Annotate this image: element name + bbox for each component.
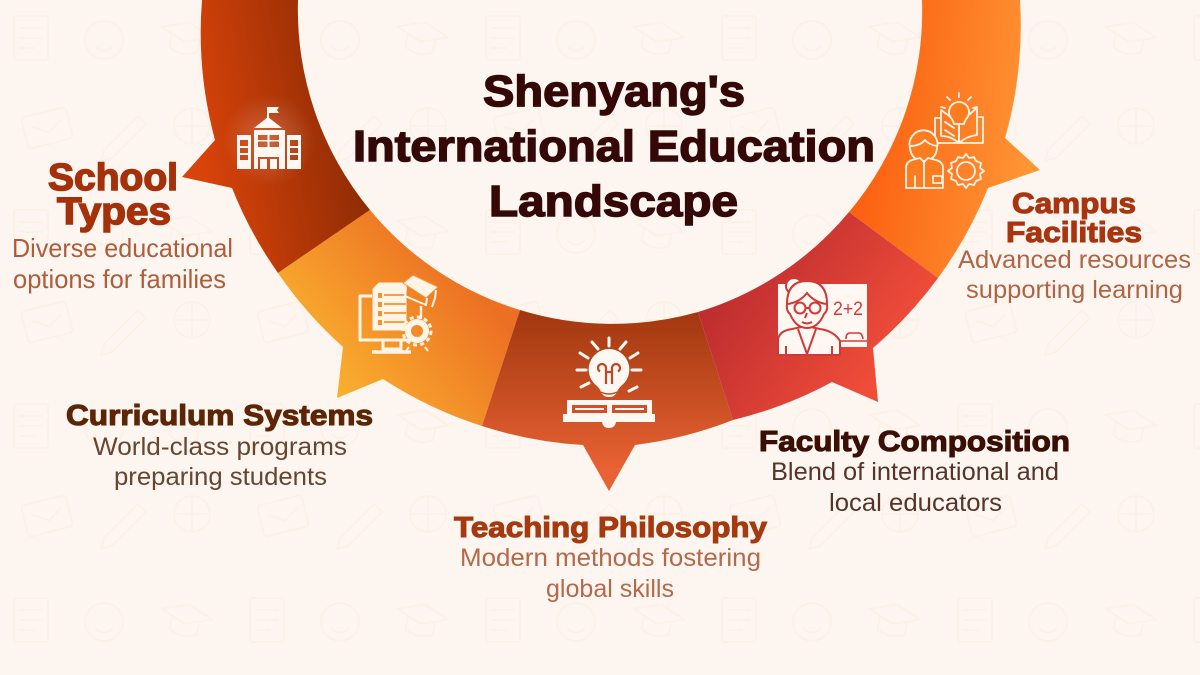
heading: School Types: Types	[57, 191, 171, 233]
description: Campus Facilities	[958, 246, 1191, 304]
title	[353, 67, 875, 226]
panel: School Types	[12, 0, 370, 294]
heading: Teaching Philosophy: Teaching Philosophy	[454, 512, 767, 544]
description: Faculty Composition: local educators	[829, 489, 1002, 517]
description: Faculty Composition	[771, 458, 1059, 517]
description: Teaching Philosophy: global skills	[546, 575, 674, 603]
icon: person, book with bulb and gear	[906, 93, 984, 188]
description: Teaching Philosophy	[460, 544, 761, 603]
description: Teaching Philosophy: Modern methods fostering	[460, 544, 761, 572]
icon: light bulb over open book	[563, 338, 655, 428]
title: Shenyang's	[483, 67, 745, 116]
description: Campus Facilities: supporting learning	[966, 276, 1183, 304]
arc segment with pointer: Teaching Philosophy	[482, 310, 733, 491]
title: Landscape	[489, 177, 738, 226]
arc segment with pointer: Curriculum Systems	[278, 210, 520, 426]
heading: School Types	[48, 157, 178, 233]
title: International Education	[353, 122, 875, 171]
description: School Types: options for families	[13, 264, 226, 294]
panel: Curriculum Systems	[66, 210, 520, 491]
heading: Campus Facilities: Campus	[1012, 188, 1136, 220]
icon: teacher at chalkboard	[778, 278, 867, 355]
description: Curriculum Systems: preparing students	[114, 463, 327, 491]
panel: Faculty Composition	[698, 212, 1070, 517]
icon: curriculum monitor, document, cap and gear	[360, 275, 438, 352]
heading: Campus Facilities: Facilities	[1006, 217, 1142, 249]
panel: Campus Facilities	[849, 0, 1191, 304]
icon: teacher at chalkboard: 2+2	[833, 299, 863, 320]
description: Curriculum Systems: World-class programs	[93, 433, 347, 461]
heading: Curriculum Systems: Curriculum Systems	[66, 400, 373, 432]
arc segment with pointer: Campus Facilities	[849, 0, 1040, 278]
heading: Campus Facilities	[1006, 188, 1142, 249]
heading: School Types: School	[48, 157, 178, 199]
arc segment with pointer: School Types	[182, 0, 370, 273]
description: School Types	[12, 233, 233, 294]
panel: Teaching Philosophy	[454, 310, 767, 603]
description: Campus Facilities: Advanced resources	[958, 246, 1191, 274]
description: School Types: Diverse educational	[12, 233, 233, 263]
description: Faculty Composition: Blend of international and	[771, 458, 1059, 486]
icon: school building	[223, 94, 315, 186]
heading: Faculty Composition: Faculty Composition	[759, 426, 1070, 458]
arc segment with pointer: Faculty Composition	[698, 212, 938, 420]
description: Curriculum Systems	[93, 433, 347, 491]
